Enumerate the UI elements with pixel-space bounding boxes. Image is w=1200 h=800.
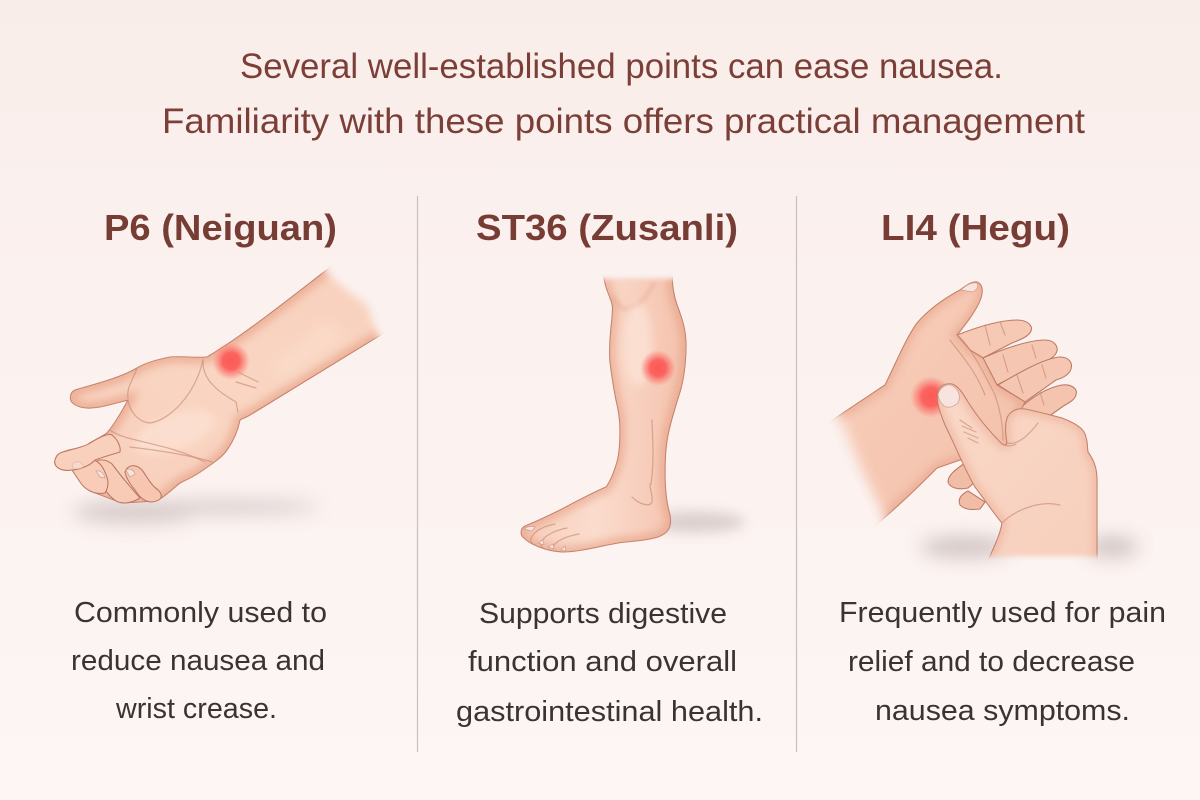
- toes: [531, 524, 579, 549]
- description: P6: [71, 597, 327, 725]
- palm highlight: [129, 401, 221, 463]
- description: LI4: Frequently used for pain: [839, 597, 1166, 629]
- little finger: [125, 466, 161, 502]
- description: P6: wrist crease.: [115, 693, 277, 725]
- skin edge shading: [937, 384, 1097, 565]
- description: P6: Commonly used to: [74, 597, 327, 629]
- leg shadow: [645, 511, 745, 533]
- skin edge shading: [830, 282, 1025, 530]
- title: Familiarity with these points offers practical management: [162, 102, 1085, 141]
- thumb nail of receiving hand: [961, 283, 978, 292]
- knee shading: [612, 282, 655, 309]
- description: ST36: gastrointestinal health.: [456, 696, 763, 728]
- shin highlight: [624, 303, 652, 387]
- palm creases: [128, 360, 203, 423]
- index finger: [55, 434, 120, 470]
- fingernails: [72, 462, 135, 478]
- illustration: open hand and wrist with P6 point: [55, 256, 392, 524]
- skin edge shading: [70, 270, 380, 502]
- illustration: lower leg and foot with ST36 point: [521, 270, 745, 552]
- description: ST36: Supports digestive: [479, 598, 727, 630]
- P6 red point: [212, 342, 250, 380]
- nail of pressing thumb: [938, 385, 959, 407]
- hand shadow: [73, 500, 320, 524]
- description: LI4: nausea symptoms.: [875, 695, 1130, 727]
- finger joint creases: [957, 335, 1003, 440]
- heading: P6: P6 (Neiguan): [104, 207, 337, 248]
- illustration: thumb pressing LI4 point on the hand: [830, 282, 1138, 565]
- ring finger: [93, 460, 140, 503]
- LI4 red point: [910, 376, 952, 418]
- fingers of receiving hand: [948, 320, 1076, 510]
- title: Several well-established points can ease nausea.: [240, 47, 1003, 86]
- panel: P6 (Neiguan): [55, 207, 392, 725]
- toenails: [524, 526, 566, 551]
- heading: LI4: LI4 (Hegu): [881, 207, 1070, 248]
- heading: ST36: ST36 (Zusanli): [476, 207, 738, 248]
- title: [162, 47, 1085, 141]
- ST36 red point: [640, 350, 676, 386]
- knuckle creases: [960, 420, 978, 443]
- pressing hand: [937, 384, 1097, 565]
- description: ST36: function and overall: [468, 646, 737, 678]
- description: LI4: relief and to decrease: [848, 646, 1135, 678]
- panel: ST36 (Zusanli): [456, 207, 763, 728]
- forearm and hand: [63, 256, 392, 503]
- ankle bone: [632, 484, 652, 505]
- receiving hand palm: [830, 282, 1025, 530]
- leg and foot: [521, 270, 686, 552]
- description: LI4: [839, 597, 1166, 727]
- description: ST36: [456, 598, 763, 728]
- description: P6: reduce nausea and: [71, 645, 325, 677]
- forearm highlight: [270, 320, 350, 380]
- hands shadow: [920, 536, 1138, 558]
- middle finger: [72, 459, 108, 493]
- panel: LI4 (Hegu): [830, 207, 1166, 727]
- skin edge shading: [521, 270, 686, 552]
